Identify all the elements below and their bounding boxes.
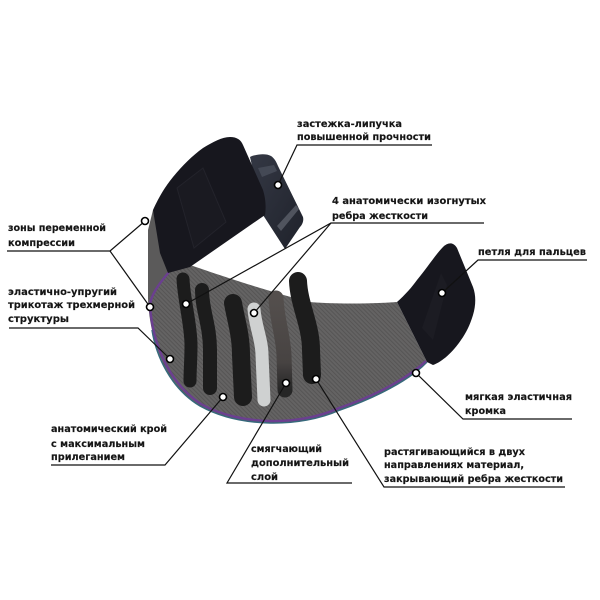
callout: anatomical cut: анатомический крой [51,424,167,435]
callout: soft extra layer: дополнительный [251,458,349,469]
callout: soft extra layer [227,380,352,483]
left velcro panel [153,137,266,273]
callout: soft extra layer: слой [251,472,278,483]
callout: finger loop: петля для пальцев [478,247,586,258]
callout: anatomical cut: с максимальным [51,439,145,450]
callout: compression zones [7,218,154,310]
callout: four ribs: 4 анатомически изогнутых [332,196,487,207]
ribs [183,279,191,381]
body [148,265,427,423]
callout: elastic knit: трикотаж трехмерной [8,300,135,311]
callout: four ribs [182,196,487,316]
right finger loop panel [397,243,475,365]
back strap [250,154,303,249]
callout: finger loop [438,247,587,296]
callout: elastic knit: эластично-упругий [8,287,117,298]
callout: velcro fastener: повышенной прочности [297,132,431,143]
callout: compression zones: зоны переменной [8,223,106,234]
edge binding [150,272,426,421]
callout: elastic knit [8,287,174,362]
callout: soft edge: кромка [465,406,506,417]
callout: soft edge [412,370,572,419]
callout: velcro fastener [274,119,432,188]
callout: compression zones: компрессии [8,238,75,249]
callout: stretch material: направлениях материал, [384,460,524,471]
callout: elastic knit: структуры [8,314,69,325]
callout: four ribs: ребра жесткости [332,210,428,222]
callout: stretch material [312,376,565,487]
callout: velcro fastener: застежка-липучка [297,119,402,130]
side strip [148,210,175,310]
callout: anatomical cut [51,394,226,465]
brace illustration [148,137,475,423]
callout: stretch material: закрывающий ребра жесткости [384,473,563,485]
callout: stretch material: растягивающийся в двух [384,447,526,458]
callout: anatomical cut: прилеганием [51,452,125,463]
callout: soft extra layer: смягчающий [251,444,322,455]
callout: soft edge: мягкая эластичная [465,392,572,403]
